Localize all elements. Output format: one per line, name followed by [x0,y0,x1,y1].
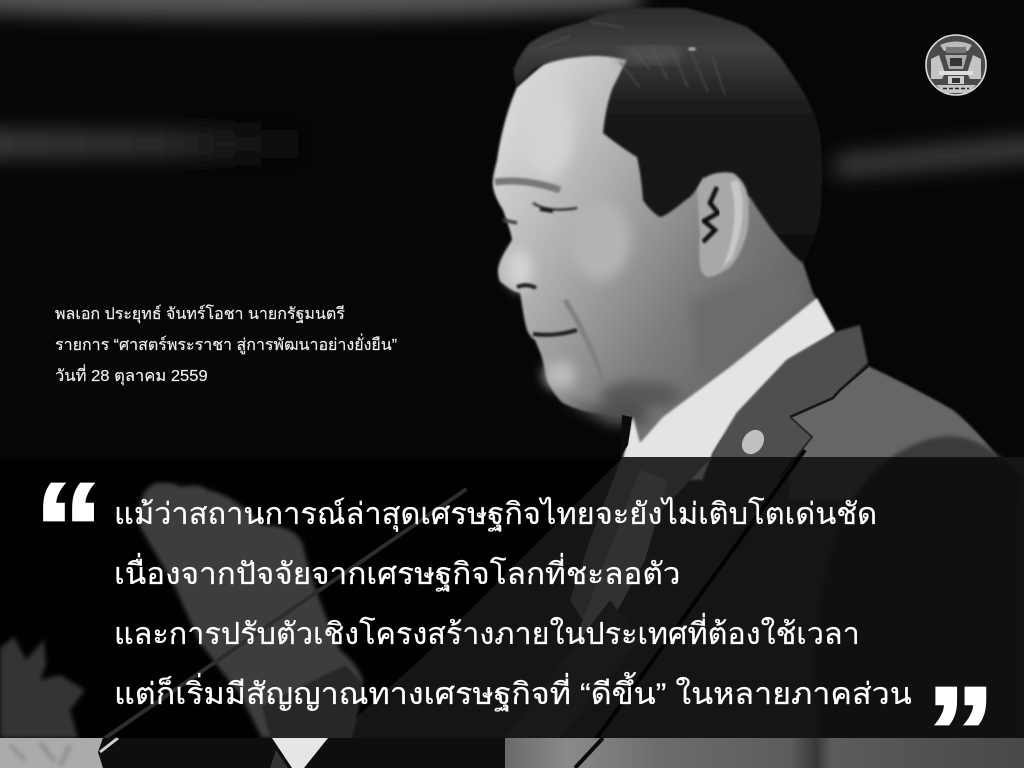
shirt cuff [272,738,328,768]
speech source text: พลเอก ประยุทธ์ จันทร์โอชา นายกรัฐมนตรี [55,306,345,323]
quote text: แต่ก็เริ่มมีสัญญาณทางเศรษฐกิจที่ “ดีขึ้น” ในหลายภาคส่วน [114,678,912,711]
dark upper arm [815,436,1024,768]
hand [139,483,363,738]
blurred background lights [0,0,1024,178]
ear [697,172,749,277]
microphone [105,490,465,738]
opening quotation mark: “ [34,457,103,602]
shirt front under panel [570,457,712,640]
speech source text: รายการ “ศาสตร์พระราชา สู่การพัฒนาอย่างยั่งยืน” [55,337,397,354]
hair streaks and highlight [540,22,725,95]
translucent quote panel [0,457,1024,738]
jacket body [300,457,1024,768]
speech source text [55,304,397,386]
jacket lapel line [575,450,805,768]
lower right jacket [505,738,1024,768]
collar shadow [620,415,632,458]
head and neck skin [493,50,835,450]
lower jacket seam [575,738,603,768]
face shading [508,82,805,425]
hair [513,8,822,263]
quote text: แม้ว่าสถานการณ์ล่าสุดเศรษฐกิจไทยจะยังไม่เติบโตเด่นชัด [114,498,877,531]
jacket shoulder [790,366,1024,500]
seal of the Thai government [925,34,987,96]
lapel pin [737,426,769,458]
lower band [100,738,1024,768]
quote text: เนื่องจากปัจจัยจากเศรษฐกิจโลกที่ชะลอตัว [114,558,680,591]
cuff stripe [100,738,118,752]
flowers [0,637,85,738]
cuff shadow [270,750,288,768]
quote text [114,496,912,712]
speech source text: วันที่ 28 ตุลาคม 2559 [55,368,208,385]
lower left table cloth [0,738,103,768]
tie [575,470,668,660]
shirt collar [623,298,835,480]
eye, nose and mouth [495,181,605,385]
jacket lapel [703,325,868,480]
cloth texture [10,742,70,766]
lapel edge [780,417,812,477]
sleeve cuff [262,665,362,738]
quote text: และการปรับตัวเชิงโครงสร้างภายในประเทศที่ต้องใช้เวลา [114,618,860,651]
lapel notch line [790,366,868,417]
dark area around shirt [505,600,640,738]
